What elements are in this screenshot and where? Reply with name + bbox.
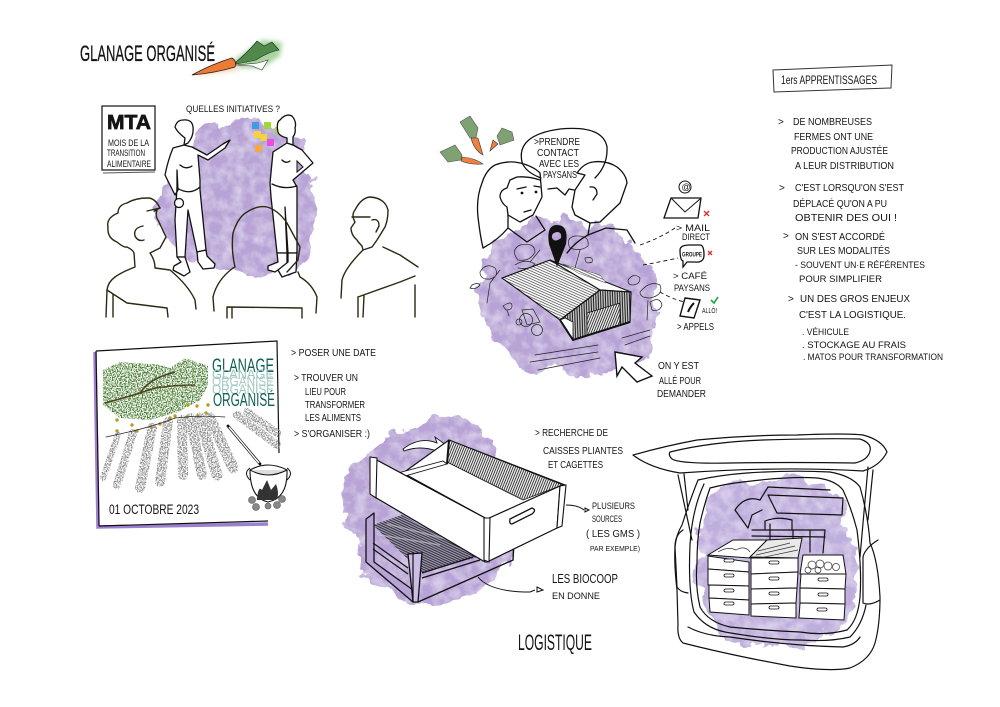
learning 1: > bbox=[778, 117, 784, 128]
label: café paysans: > CAFÉ bbox=[673, 271, 707, 281]
panel: loaded van bbox=[633, 434, 887, 670]
icon: cooking pot on fire bbox=[228, 426, 290, 510]
icon: map pin bbox=[548, 225, 567, 267]
learning 2: C'EST LORSQU'ON S'EST bbox=[795, 183, 904, 194]
learning 3: - SOUVENT UN·E RÉFÉRENTES bbox=[795, 260, 925, 270]
speech bubble: PAYSANS bbox=[543, 170, 577, 181]
learning 1: FERMES ONT UNE bbox=[794, 132, 873, 143]
field furrows bbox=[530, 330, 650, 370]
title: GLANAGE ORGANISÉ bbox=[80, 41, 215, 66]
panel: event poster bbox=[95, 341, 290, 527]
caption: on y est allé: DEMANDER bbox=[657, 389, 706, 400]
MTA poster: ALIMENTAIRE bbox=[107, 159, 151, 169]
van outline and tailgate bbox=[633, 434, 887, 670]
watercolour wash: farm bbox=[478, 220, 659, 375]
farmer man face bbox=[567, 162, 635, 253]
caption: on y est allé: ALLÉ POUR bbox=[659, 374, 701, 387]
panel: premiers apprentissages bbox=[773, 65, 943, 362]
question heading: QUELLES INITIATIVES ? bbox=[186, 104, 280, 114]
text block: event to-do list: LES ALIMENTS bbox=[305, 413, 361, 424]
poster title: GLANAGE bbox=[212, 356, 274, 377]
learning 4: UN DES GROS ENJEUX bbox=[800, 294, 910, 305]
wooden crate bbox=[366, 513, 514, 602]
farmer woman face bbox=[478, 162, 545, 248]
label: mail direct: DIRECT bbox=[682, 232, 710, 242]
label: mail direct bbox=[676, 223, 710, 242]
watercolour wash: presentation bbox=[160, 118, 315, 280]
learning 1 bbox=[778, 117, 894, 172]
speech bubble: AVEC LES bbox=[539, 159, 579, 170]
text block: event to-do list: > TROUVER UN bbox=[294, 373, 358, 384]
learning 3: SUR LES MODALITÉS bbox=[797, 244, 890, 257]
poster title: ORGANISÉ bbox=[212, 381, 274, 397]
text: recherche de caisses: > RECHERCHE DE bbox=[535, 428, 608, 439]
panel: farm contact bbox=[440, 116, 718, 400]
text block: event to-do list bbox=[291, 348, 376, 440]
presenter pointing bbox=[165, 120, 230, 276]
tree branches bbox=[105, 372, 195, 403]
text block: event to-do list: > S'ORGANISER :) bbox=[294, 429, 370, 440]
heading: logistique: LOGISTIQUE bbox=[518, 630, 592, 655]
label: café paysans bbox=[673, 271, 710, 293]
pointer and text: plusieurs sources: PLUSIEURS bbox=[592, 501, 635, 511]
learning 1: PRODUCTION AJUSTÉE bbox=[791, 144, 888, 157]
icon: title carrot bbox=[192, 40, 282, 76]
speech bubble: CONTACT bbox=[537, 148, 579, 159]
pointer and text: plusieurs sources bbox=[566, 501, 640, 553]
icon: phone: ALLÔ! bbox=[702, 306, 717, 315]
learning 4: . STOCKAGE AU FRAIS bbox=[802, 340, 906, 350]
learning 3: ON S'EST ACCORDÉ bbox=[795, 230, 885, 243]
icon: email: @ bbox=[682, 182, 691, 192]
learning 1: DE NOMBREUSES bbox=[793, 117, 872, 128]
facilitator hands on hip bbox=[268, 115, 313, 277]
learning 3 bbox=[783, 230, 925, 284]
learning 2: > bbox=[779, 183, 785, 194]
speech bubble bbox=[521, 128, 607, 195]
icon: three carrots bbox=[440, 116, 514, 164]
audience member left bbox=[106, 198, 196, 317]
field rows bbox=[103, 412, 277, 488]
poster title bbox=[212, 356, 275, 410]
pointer and text: les biocoop bbox=[478, 571, 618, 601]
learning 4: > bbox=[788, 294, 794, 305]
learning 4 bbox=[788, 294, 943, 362]
speech bubble: >PRENDRE bbox=[534, 137, 580, 148]
sticky notes bbox=[252, 122, 280, 152]
heading box bbox=[773, 65, 892, 92]
arrow: flip the crate bbox=[403, 437, 453, 464]
tree foliage bbox=[103, 358, 208, 420]
icon: group chat bbox=[680, 245, 712, 267]
MTA poster: MOIS DE LA bbox=[108, 138, 149, 148]
icon: email bbox=[664, 181, 709, 218]
caption: on y est allé bbox=[657, 361, 706, 400]
label: café paysans: PAYSANS bbox=[674, 283, 710, 293]
learning 2 bbox=[779, 183, 904, 224]
learning 4: . VÉHICULE bbox=[802, 327, 849, 337]
folding crate bbox=[370, 440, 566, 562]
watercolour wash: crates bbox=[342, 418, 523, 604]
MTA poster bbox=[102, 106, 155, 173]
pointer and text: plusieurs sources: SOURCES bbox=[592, 514, 622, 524]
pointer and text: plusieurs sources: ( LES GMS ) bbox=[586, 529, 640, 540]
poster sheet bbox=[95, 341, 279, 527]
text: recherche de caisses: CAISSES PLIANTES bbox=[543, 446, 623, 457]
learning 4: C'EST LA LOGISTIQUE. bbox=[799, 310, 906, 321]
trees and tractor bbox=[470, 236, 662, 336]
learning 2: OBTENIR DES OUI ! bbox=[795, 213, 897, 224]
learning 2: DÉPLACÉ QU'ON A PU bbox=[793, 197, 887, 210]
learning 3: > bbox=[783, 231, 789, 242]
heading box: 1ers APPRENTISSAGES bbox=[781, 73, 877, 87]
pointer and text: les biocoop: EN DONNE bbox=[552, 591, 600, 601]
pointer and text: les biocoop: LES BIOCOOP bbox=[552, 571, 618, 586]
label: appels: > APPELS bbox=[677, 322, 714, 333]
learning 4: . MATOS POUR TRANSFORMATION bbox=[803, 352, 943, 362]
learning 1: A LEUR DISTRIBUTION bbox=[795, 161, 894, 172]
MTA poster: MTA bbox=[107, 112, 151, 134]
poster title: ORGANISÉ bbox=[213, 390, 275, 410]
panel: crates logistics bbox=[342, 418, 640, 655]
crates in the van bbox=[708, 538, 846, 620]
poster horizon bbox=[106, 416, 225, 437]
poster title: ORGANISÉ bbox=[212, 373, 274, 389]
text block: event to-do list: TRANSFORMER bbox=[305, 400, 365, 411]
icon: group chat: GROUPE bbox=[682, 252, 702, 258]
falling fruit bbox=[115, 403, 210, 433]
audience member centre bbox=[213, 207, 317, 318]
text block: event to-do list: LIEU POUR bbox=[305, 387, 346, 398]
text: recherche de caisses bbox=[535, 428, 623, 471]
panel: MTA presentation bbox=[102, 104, 418, 318]
watercolour wash: van bbox=[694, 479, 858, 652]
text: recherche de caisses: ET CAGETTES bbox=[548, 460, 603, 471]
pointer and text: plusieurs sources: PAR EXEMPLE) bbox=[590, 546, 640, 553]
contact dashed lines bbox=[640, 228, 684, 302]
caption: on y est allé: ON Y EST bbox=[658, 361, 699, 372]
icon: phone bbox=[680, 297, 718, 318]
audience member right bbox=[341, 197, 418, 317]
farm barn bbox=[502, 260, 631, 340]
text block: event to-do list: > POSER UNE DATE bbox=[291, 348, 376, 359]
MTA poster: TRANSITION bbox=[107, 148, 145, 158]
learning 3: POUR SIMPLIFIER bbox=[799, 274, 883, 284]
arrow pointing to the farm bbox=[615, 352, 652, 382]
poster title: GLANAGE bbox=[212, 366, 274, 382]
poster date: 01 OCTOBRE 2023 bbox=[109, 501, 199, 517]
label: mail direct: > MAIL bbox=[676, 223, 710, 233]
